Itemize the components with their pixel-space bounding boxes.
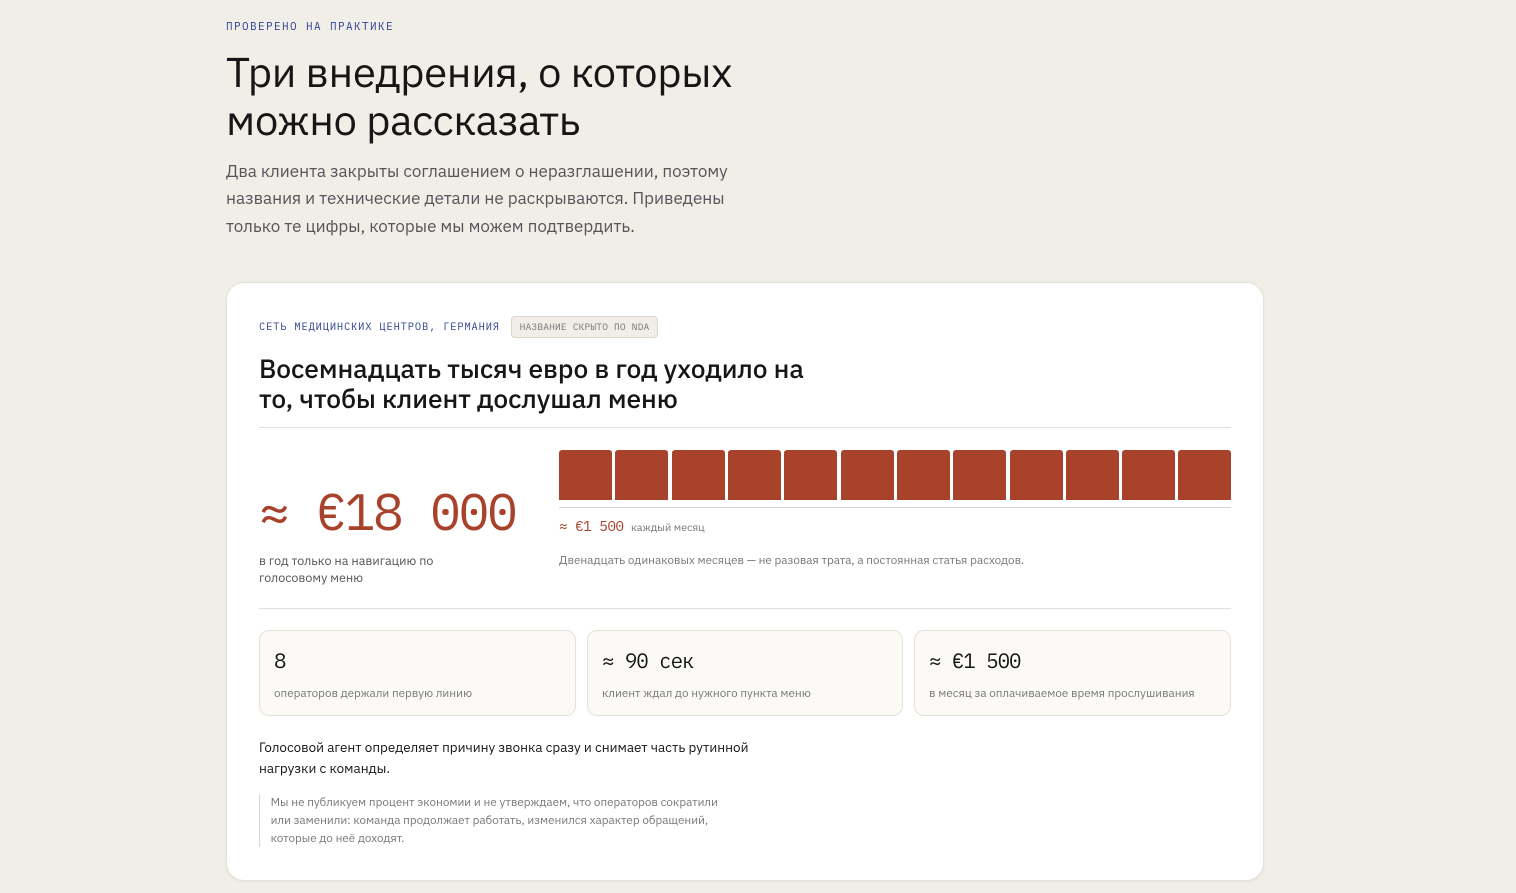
intro text: только те цифры, которые мы можем подтвердить. — [226, 215, 635, 237]
case heading — [259, 352, 804, 416]
outcome text — [259, 738, 748, 777]
NDA badge: НАЗВАНИЕ СКРЫТО ПО NDA — [520, 320, 649, 333]
chart note: Двенадцать одинаковых месяцев — не разовая трата, а постоянная статья расходов. — [559, 553, 1024, 568]
big number caption: в год только на навигацию по — [259, 553, 433, 569]
eyebrow: ПРОВЕРЕНО НА ПРАКТИКЕ — [226, 20, 394, 34]
stat card: operators: 8 — [274, 647, 285, 674]
big number caption: голосовому меню — [259, 570, 363, 586]
title: можно рассказать — [226, 92, 580, 147]
stat card: operators: операторов держали первую линию — [274, 686, 472, 701]
intro text: названия и технические детали не раскрываются. Приведены — [226, 187, 725, 209]
stat card: wait time: ≈ 90 сек — [602, 647, 693, 674]
stat card: operators — [259, 630, 576, 716]
disclaimer note: или заменили: команда продолжает работать, изменился характер обращений, — [271, 813, 708, 828]
monthly caption: каждый месяц — [631, 520, 705, 534]
stat card: wait time: клиент ждал до нужного пункта меню — [602, 686, 811, 701]
stat card: monthly cost: в месяц за оплачиваемое время прослушивания — [929, 686, 1195, 701]
NDA badge — [511, 316, 658, 338]
disclaimer note: Мы не публикуем процент экономии и не утверждаем, что операторов сократили — [271, 795, 718, 810]
client label: СЕТЬ МЕДИЦИНСКИХ ЦЕНТРОВ, ГЕРМАНИЯ — [259, 319, 500, 333]
monthly bar chart — [559, 450, 1231, 508]
intro text: Два клиента закрыты соглашением о неразглашении, поэтому — [226, 160, 728, 182]
stat card: monthly cost — [914, 630, 1231, 716]
outcome text: Голосовой агент определяет причину звонка сразу и снимает часть рутинной — [259, 738, 748, 756]
disclaimer note — [259, 794, 718, 847]
big number: ≈ €18 000 — [259, 479, 516, 545]
title — [226, 44, 732, 147]
disclaimer note: которые до неё доходят. — [271, 831, 404, 846]
case heading: то, чтобы клиент дослушал меню — [259, 382, 678, 416]
intro text — [226, 160, 728, 237]
stat card: monthly cost: ≈ €1 500 — [929, 647, 1020, 674]
panel: case card — [226, 282, 1264, 881]
outcome text: нагрузки с команды. — [259, 759, 390, 777]
case heading: Восемнадцать тысяч евро в год уходило на — [259, 352, 804, 386]
monthly amount: ≈ €1 500 — [559, 516, 623, 535]
stat card: wait time — [587, 630, 903, 716]
big number caption — [259, 553, 433, 586]
title: Три внедрения, о которых — [226, 44, 732, 99]
